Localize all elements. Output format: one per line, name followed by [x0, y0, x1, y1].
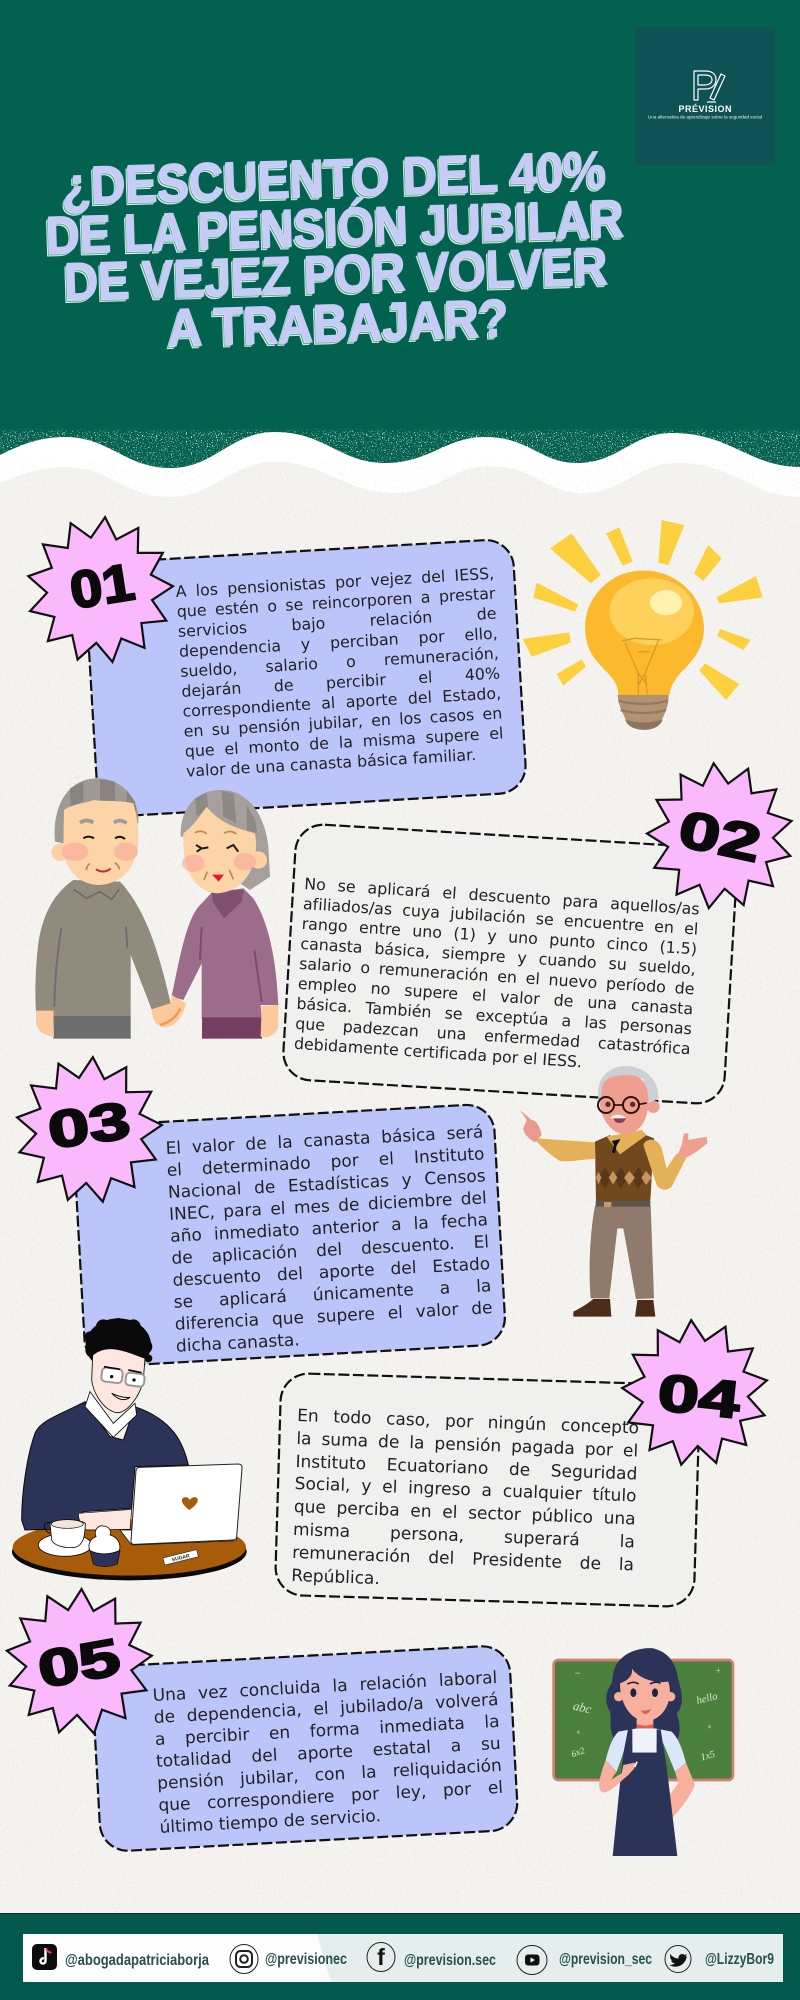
panel 05 text: a percibir en forma inmediata la	[154, 1712, 500, 1750]
social strip	[23, 1934, 783, 1982]
title: A TRABAJAR?	[167, 289, 509, 358]
panel 01 text: dependencia y perciban por ello,	[179, 624, 498, 661]
panel 03 text: diferencia que supere el valor de	[174, 1298, 493, 1334]
illustration: teacher in front of chalkboard: abc	[572, 1699, 593, 1717]
illustration: teacher in front of chalkboard: ×	[707, 1722, 712, 1731]
panel 03 text: INEC, para el mes de diciembre del	[169, 1188, 487, 1224]
panel 04 text: remuneración del Presidente de la	[292, 1543, 634, 1575]
illustration: elderly couple holding hands	[35, 778, 278, 1039]
panel 03 text: el determinado por el Instituto	[166, 1144, 485, 1181]
panel 05 text: totalidad del aporte estatal a su	[156, 1734, 501, 1772]
star badge 05: 05	[34, 1628, 125, 1700]
panel 04 text: República.	[291, 1565, 380, 1589]
star badge 01	[26, 515, 175, 664]
panel 04 text: En todo caso, por ningún concepto	[297, 1406, 639, 1439]
panel 01 text: que el monto de la misma supere el	[184, 723, 504, 761]
panel 04 text: Instituto Ecuatoriano de Seguridad	[295, 1452, 638, 1484]
icon: youtube	[517, 1946, 547, 1974]
title: ¿DESCUENTO DEL 40%	[61, 141, 607, 216]
panel 02 text: No se aplicará el descuento para aquellos/as	[303, 874, 700, 919]
illustration: old man in vest pointing	[520, 1066, 708, 1317]
panel 05 text: Una vez concluida la relación laboral	[152, 1668, 498, 1706]
panel 01 text: correspondiente al aporte del Estado,	[182, 683, 502, 721]
panel 04 text: Social, y el ingreso a cualquier título	[294, 1474, 637, 1507]
panel 02 text: afiliados/as cuya jubilación se encuentre en el	[302, 894, 698, 939]
panel 05 text	[152, 1668, 503, 1838]
icon: light bulb	[522, 520, 763, 730]
panel 03 text: descuento del aporte del Estado	[172, 1254, 491, 1290]
footer bar	[0, 1913, 800, 2000]
panel 02 text	[293, 874, 700, 1071]
panel 01 text: A los pensionistas por vejez del IESS,	[175, 564, 495, 601]
icon: tiktok	[32, 1944, 57, 1970]
star badge 04	[620, 1318, 769, 1467]
illustration: man with laptop at cafe table	[12, 1318, 247, 1580]
panel 05 text: pensión jubilar, con la reliquidación	[157, 1756, 502, 1794]
logo panel: Una alternativa de aprendizaje sobre la seguridad social	[648, 114, 762, 120]
icon: facebook: f	[377, 1944, 385, 1970]
illustration: teacher in front of chalkboard: ~	[575, 1670, 580, 1680]
panel 05 text: de dependencia, el jubilado/a volverá	[153, 1690, 499, 1728]
panel 01 text: que estén o se reincorporen a prestar	[176, 584, 496, 621]
panel 02 text: empleo no supere el valor de una canasta	[297, 974, 693, 1018]
panel 02 text: básica. También se exceptúa a las personas	[296, 994, 692, 1038]
illustration: teacher in front of chalkboard	[552, 1648, 734, 1856]
panel 01 text: servicios bajo relación de	[177, 604, 497, 641]
panel 04 background	[274, 1372, 700, 1608]
panel 04 text: que perciba en el sector público una	[294, 1497, 636, 1530]
social strip: @abogadapatriciaborja	[65, 1952, 209, 1969]
panel 03 text: El valor de la canasta básica será	[165, 1122, 484, 1159]
illustration: teacher in front of chalkboard: +	[715, 1667, 721, 1677]
panel 03 text: Nacional de Estadísticas y Censos	[167, 1166, 486, 1203]
star badge 03: 03	[45, 1092, 134, 1160]
panel 05 text: que correspondiere por ley, por el	[158, 1778, 503, 1816]
panel 02 text: salario o remuneración en el nuevo período de	[298, 954, 695, 998]
panel 05 text: último tiempo de servicio.	[159, 1806, 381, 1838]
panel 02 text: que padezcan una enfermedad catastrófica	[294, 1014, 691, 1058]
star badge 01: 01	[66, 553, 138, 621]
panel 03 text: dicha canasta.	[176, 1330, 300, 1356]
logo panel	[635, 27, 775, 165]
icon: instagram	[230, 1944, 258, 1974]
icon: twitter	[665, 1946, 691, 1972]
star badge 02	[645, 761, 794, 910]
social strip: @previsionec	[265, 1951, 347, 1968]
star badge 02: 02	[674, 800, 766, 874]
panel 02 text: debidamente certificada por el IESS.	[293, 1034, 582, 1071]
panel 02 background	[282, 824, 736, 1104]
star badge 03	[15, 1055, 164, 1204]
star badge 05	[4, 1586, 154, 1735]
panel 03 text: año inmediato anterior a la fecha	[170, 1210, 488, 1246]
panel 04 text: misma persona, superará la	[293, 1520, 635, 1552]
panel 03 text: se aplicará únicamente a la	[173, 1276, 492, 1312]
title: DE VEJEZ POR VOLVER	[64, 237, 608, 312]
panel 05 background	[94, 1645, 518, 1852]
title: DE LA PENSIÓN JUBILAR	[45, 189, 625, 266]
social strip: @LizzyBor9	[705, 1951, 774, 1968]
panel 03 text	[165, 1122, 493, 1356]
panel 01 text: sueldo, salario o remuneración,	[180, 644, 499, 681]
panel 01 text: en su pensión jubilar, en los casos en	[183, 703, 503, 741]
panel 03 text: de aplicación del descuento. El	[171, 1232, 490, 1268]
panel 02 text: canasta básica, siempre y cuando su sueldo,	[299, 934, 696, 978]
panel 02 text: rango entre uno (1) y uno punto cinco (1.5)	[301, 914, 697, 958]
title	[45, 141, 625, 358]
panel 04 text	[291, 1406, 639, 1589]
star badge 04: 04	[655, 1364, 743, 1430]
illustration: teacher in front of chalkboard: ×	[576, 1728, 581, 1737]
panel 01 background	[88, 539, 527, 816]
panel 01 text	[175, 564, 504, 781]
illustration: teacher in front of chalkboard: 1x5	[699, 1749, 716, 1764]
icon: facebook	[367, 1942, 395, 1972]
illustration: teacher in front of chalkboard: hello	[695, 1691, 719, 1707]
panel 04 text: la suma de la pensión pagada por el	[296, 1429, 639, 1461]
social strip: @prevision.sec	[404, 1952, 496, 1969]
illustration: teacher in front of chalkboard: 6x2	[570, 1746, 587, 1760]
panel 03 background	[75, 1104, 506, 1366]
logo panel: PRÉVISION	[678, 104, 732, 114]
social strip: @prevision_sec	[559, 1951, 652, 1968]
panel 01 text: dejarán de percibir el 40%	[181, 663, 500, 701]
panel 01 text: valor de una canasta básica familiar.	[185, 745, 477, 781]
illustration: man with laptop at cafe table: SUGAR	[171, 1553, 191, 1563]
